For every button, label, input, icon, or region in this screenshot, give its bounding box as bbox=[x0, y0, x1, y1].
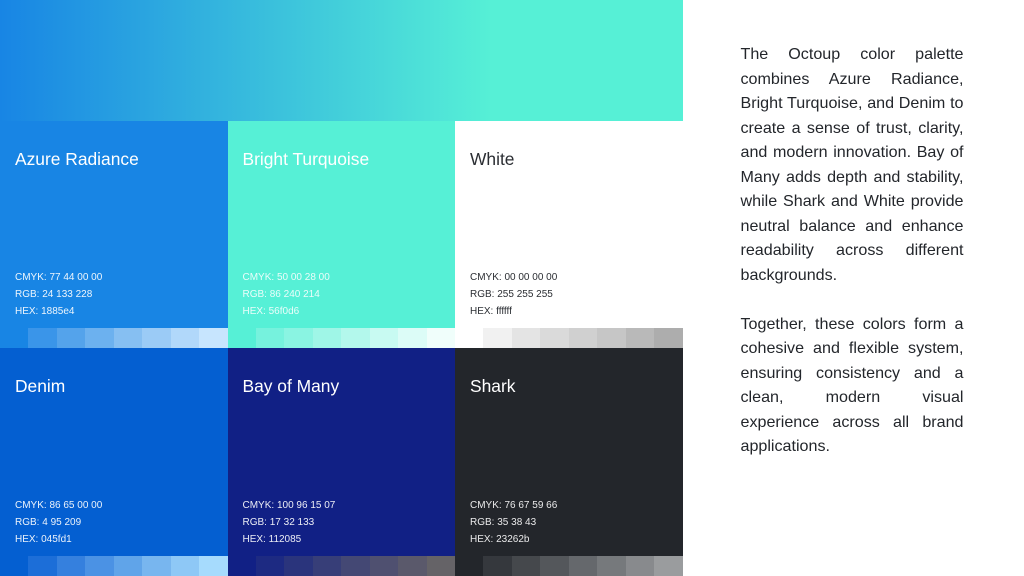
tint strip: Bay of Many bbox=[256, 556, 455, 576]
color values: Shark: RGB: 35 38 43 bbox=[470, 517, 536, 528]
text block: palette description: readability across different bbox=[740, 241, 964, 259]
text block: palette description bbox=[740, 45, 964, 455]
color values: Shark: HEX: 23262b bbox=[470, 534, 530, 545]
panel: White bbox=[455, 121, 683, 348]
color values: Bay of Many: CMYK: 100 96 15 07 bbox=[242, 500, 335, 511]
color values: Bright Turquoise: RGB: 86 240 214 bbox=[242, 289, 320, 300]
color values: Denim bbox=[15, 500, 102, 545]
color values: Bright Turquoise bbox=[242, 272, 330, 317]
color values: Bright Turquoise: HEX: 56f0d6 bbox=[242, 306, 299, 317]
text block: palette description: clean, modern visual bbox=[740, 388, 964, 406]
tint strip: Denim bbox=[28, 556, 228, 576]
tint strip: Shark bbox=[483, 556, 683, 576]
heading: Shark: Shark bbox=[470, 376, 515, 396]
text block: palette description: Together, these colors form a bbox=[740, 314, 964, 332]
text block: palette description: Many adds depth and stability, bbox=[740, 168, 964, 186]
color values: Azure Radiance bbox=[15, 272, 102, 317]
color values: Bay of Many bbox=[242, 500, 335, 545]
text block: palette description: while Shark and White provide bbox=[740, 192, 964, 210]
gradient banner bbox=[0, 0, 683, 121]
text block: palette description: cohesive and flexible system, bbox=[740, 339, 964, 357]
color values: White: RGB: 255 255 255 bbox=[470, 289, 553, 300]
text block: palette description: neutral balance and enhance bbox=[740, 216, 964, 234]
text block: palette description: applications. bbox=[740, 437, 830, 455]
panel: Shark bbox=[455, 348, 683, 576]
tint strip: Azure Radiance bbox=[28, 328, 228, 348]
tint strip: Bright Turquoise bbox=[256, 328, 455, 348]
color values: Denim: RGB: 4 95 209 bbox=[15, 517, 81, 528]
color values: Azure Radiance: CMYK: 77 44 00 00 bbox=[15, 272, 102, 283]
text block: palette description: ensuring consistency and a bbox=[740, 364, 964, 382]
color values: White: HEX: ffffff bbox=[470, 306, 512, 317]
color values: Denim: HEX: 045fd1 bbox=[15, 534, 72, 545]
heading: Denim: Denim bbox=[15, 376, 65, 396]
color values: Denim: CMYK: 86 65 00 00 bbox=[15, 500, 102, 511]
color values: White: CMYK: 00 00 00 00 bbox=[470, 272, 557, 283]
tint strip: White bbox=[483, 328, 683, 348]
panel: Azure Radiance bbox=[0, 121, 228, 348]
heading: Bright Turquoise: Bright Turquoise bbox=[242, 149, 369, 169]
text block: palette description: and modern innovation. Bay of bbox=[740, 143, 964, 161]
text block: palette description: The Octoup color palette bbox=[740, 45, 964, 63]
text block: palette description: create a sense of trust, clarity, bbox=[740, 118, 964, 136]
color values: Azure Radiance: HEX: 1885e4 bbox=[15, 306, 74, 317]
text block: palette description: experience across all brand bbox=[740, 412, 964, 430]
color values: Shark bbox=[470, 500, 557, 545]
color values: Shark: CMYK: 76 67 59 66 bbox=[470, 500, 557, 511]
text block: palette description: backgrounds. bbox=[740, 266, 837, 284]
text block: palette description: combines Azure Radiance, bbox=[740, 70, 964, 88]
panel: Bright Turquoise bbox=[228, 121, 456, 348]
heading: Azure Radiance: Azure Radiance bbox=[15, 149, 139, 169]
heading: White: White bbox=[470, 149, 514, 169]
heading: Bay of Many: Bay of Many bbox=[242, 376, 339, 396]
text block: palette description: Bright Turquoise, and Denim to bbox=[740, 94, 964, 112]
color values: Bay of Many: HEX: 112085 bbox=[242, 534, 301, 545]
panel: Denim bbox=[0, 348, 228, 576]
color values: Azure Radiance: RGB: 24 133 228 bbox=[15, 289, 92, 300]
color values: Bay of Many: RGB: 17 32 133 bbox=[242, 517, 314, 528]
panel: Bay of Many bbox=[228, 348, 456, 576]
color values: Bright Turquoise: CMYK: 50 00 28 00 bbox=[242, 272, 330, 283]
color values: White bbox=[470, 272, 557, 317]
